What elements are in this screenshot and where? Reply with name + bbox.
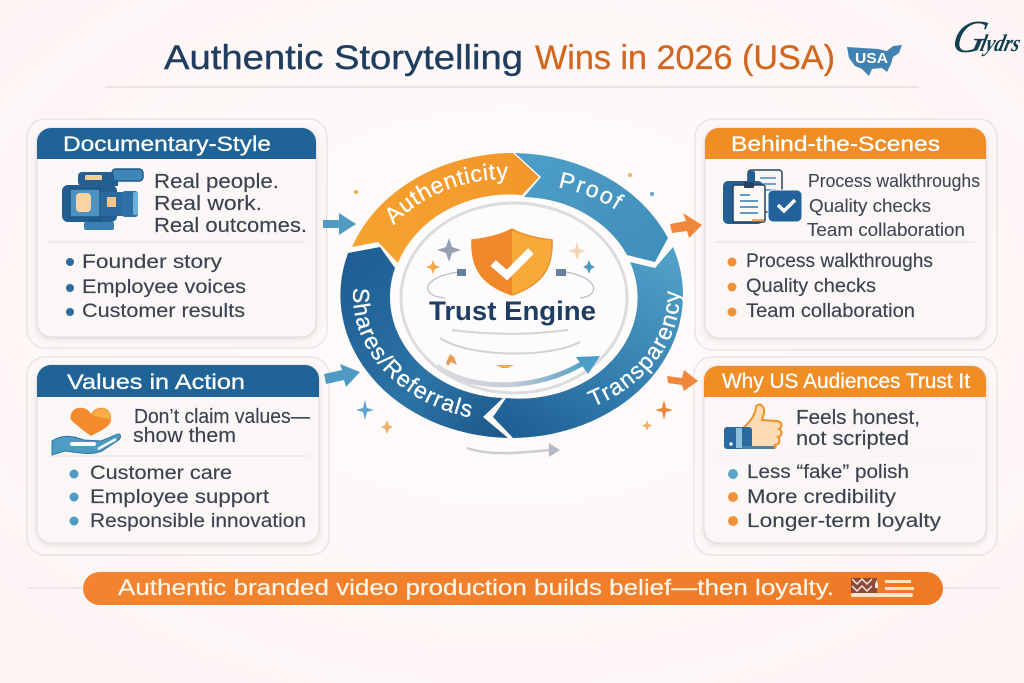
- tagline: Don’t claim values—: [134, 406, 310, 428]
- bullet list: [728, 251, 933, 322]
- panel: Documentary-Style: [27, 119, 327, 348]
- bullet list: Less “fake” polish: [747, 462, 909, 483]
- icon: thumbs up: [724, 405, 782, 449]
- text lines: Process walkthroughs: [808, 171, 980, 191]
- bullet list: More credibility: [747, 487, 897, 508]
- bullet list: Employee voices: [82, 277, 246, 298]
- panel header: [704, 366, 986, 397]
- tagline: [796, 407, 920, 450]
- bullet list: Quality checks: [746, 276, 876, 297]
- segment: shares and referrals: Shares/Referrals: [352, 288, 472, 417]
- icon: heart in hand: [52, 408, 121, 455]
- panel header: Values in Action: [67, 371, 245, 394]
- logo: [947, 12, 1024, 63]
- callout: bottom banner: Authentic branded video production builds belief—then loyalty.: [118, 575, 834, 600]
- tagline: [154, 171, 307, 237]
- bullet list: Customer care: [90, 463, 232, 484]
- bullet list: Team collaboration: [746, 301, 915, 322]
- chart: trust engine cycle: [340, 153, 683, 438]
- tagline: show them: [133, 425, 236, 447]
- bullet list: Employee support: [90, 487, 270, 508]
- tagline: not scripted: [796, 428, 909, 450]
- text lines: Quality checks: [809, 196, 931, 216]
- icon: video camera: [62, 169, 143, 230]
- icon: USA map badge: [847, 45, 902, 76]
- panel: Values in Action: [27, 357, 329, 555]
- bullet list: Customer results: [82, 301, 245, 322]
- segment: shares and referrals: [340, 247, 508, 438]
- segment: proof: [515, 153, 668, 262]
- callout: bottom banner: [83, 572, 943, 605]
- bullet list: Process walkthroughs: [746, 251, 933, 272]
- bullet list: [70, 463, 306, 532]
- panel header: [37, 128, 316, 159]
- panel header: [705, 128, 986, 159]
- label: trust engine: Trust Engine: [429, 296, 596, 326]
- text lines: [807, 171, 980, 240]
- inner circle: [401, 203, 627, 393]
- segment: authenticity: [352, 153, 539, 263]
- bullet list: [66, 252, 246, 322]
- segment: transparency: [493, 247, 683, 438]
- tagline: [133, 406, 310, 447]
- panel: Behind-the-Scenes: [695, 119, 997, 350]
- panel: Why US Audiences Trust It: [694, 357, 997, 555]
- segment: proof: Proof: [560, 172, 626, 209]
- icon: documents with check: [723, 170, 802, 224]
- arrow: ring to behind-the-scenes: [670, 213, 702, 238]
- logo: G: [947, 12, 993, 63]
- title: [164, 39, 835, 77]
- arrow: grey bottom: [467, 443, 560, 457]
- bullet list: Founder story: [82, 252, 223, 273]
- tagline: Real work.: [154, 193, 262, 215]
- arrow: documentary to ring: [323, 213, 356, 235]
- tagline: Real people.: [154, 171, 279, 193]
- panel header: Why US Audiences Trust It: [722, 370, 970, 393]
- bullet list: [728, 462, 942, 532]
- icon: USA map badge: USA: [855, 50, 888, 67]
- panel header: [37, 365, 319, 397]
- text lines: Team collaboration: [807, 220, 965, 240]
- bullet list: Longer-term loyalty: [747, 511, 942, 532]
- swoosh details: [428, 269, 594, 354]
- icon: shield with check: [472, 229, 552, 295]
- icon: flag: [851, 578, 914, 597]
- title: Authentic Storytelling: [164, 39, 523, 77]
- segment: transparency: Transparency: [586, 290, 683, 405]
- sparkles: [354, 173, 673, 434]
- arrow: inner curved arrow: [437, 356, 600, 385]
- bullet list: Responsible innovation: [90, 511, 306, 532]
- tagline: Real outcomes.: [154, 215, 307, 237]
- segment: authenticity: Authenticity: [387, 163, 508, 226]
- arrow: values to ring: [324, 364, 360, 387]
- arrow: ring to audiences: [667, 370, 698, 391]
- title: Wins in 2026 (USA): [535, 39, 835, 77]
- tagline: Feels honest,: [796, 407, 920, 429]
- panel header: Documentary-Style: [63, 133, 271, 156]
- panel header: Behind-the-Scenes: [731, 133, 940, 156]
